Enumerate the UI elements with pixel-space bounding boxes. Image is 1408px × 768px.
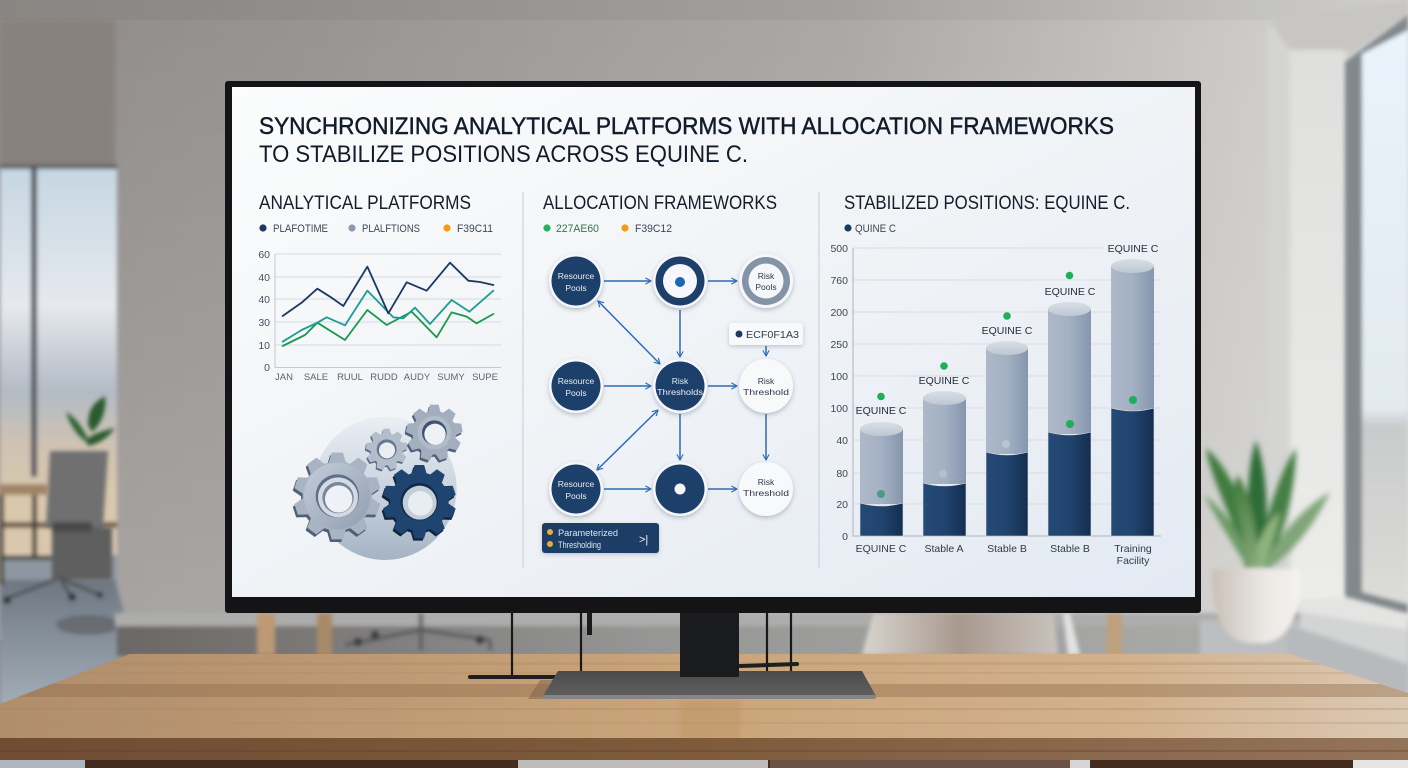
markers above bars [877, 272, 1073, 400]
legend: allocation frameworks: 227AE60 [556, 223, 599, 235]
legend: analytical platforms [259, 223, 493, 235]
node: risk threshold light [739, 359, 793, 413]
legend: analytical platforms: F39C11 [457, 223, 493, 235]
node: risk threshold bottom: Risk [758, 477, 775, 487]
monitor frame [225, 81, 1201, 613]
right window and sill [1285, 15, 1408, 695]
screen [232, 87, 1195, 597]
value labels: EQUINE C [982, 325, 1033, 337]
bar: stable b second [1048, 302, 1091, 536]
node: dark dot [653, 462, 707, 516]
category labels: Stable A [924, 543, 964, 555]
background chair seen under the monitor [257, 613, 1122, 655]
bar chart: 40 [836, 435, 848, 447]
node: resource pools middle: Resource [558, 376, 594, 386]
node: risk pools: Risk [758, 271, 775, 281]
line chart [258, 249, 501, 383]
icon: large gear [292, 453, 381, 542]
arrows [597, 281, 766, 489]
line chart: SUPE [472, 372, 498, 383]
category labels [856, 543, 1152, 567]
line chart: SUMY [437, 372, 465, 383]
value labels: EQUINE C [1108, 243, 1159, 255]
legend: allocation frameworks: F39C12 [635, 223, 672, 235]
callout: parameterized thresholding button: Parameterized [558, 528, 618, 539]
legend: analytical platforms: PLAFOTIME [273, 223, 328, 235]
heading: allocation frameworks: ALLOCATION FRAMEWORKS [543, 193, 777, 214]
node: risk pools: Pools [755, 282, 777, 292]
node: resource pools middle [549, 359, 603, 413]
category labels: EQUINE C [856, 543, 907, 555]
bar: training facility [1111, 259, 1154, 536]
bar chart: 760 [830, 275, 848, 287]
line chart: 30 [258, 317, 270, 329]
icon: small gear [365, 429, 408, 472]
potted plant [1204, 440, 1330, 643]
title: SYNCHRONIZING ANALYTICAL PLATFORMS WITH ALLOCATION FRAMEWORKS [259, 113, 1114, 140]
bar: stable b first [986, 341, 1028, 536]
node: risk thresholds dark [653, 359, 707, 413]
legend: allocation frameworks [543, 223, 672, 235]
line chart: SALE [304, 372, 328, 383]
bar chart: 80 [836, 468, 848, 480]
bar chart: 20 [836, 499, 848, 511]
node: resource pools bottom [549, 462, 603, 516]
wooden table [0, 654, 1408, 768]
bar chart: 100 [830, 371, 848, 383]
bar chart: 0 [842, 531, 848, 543]
panel: allocation frameworks [542, 193, 803, 553]
line chart: RUUL [337, 372, 363, 383]
callout: parameterized thresholding button: Thresholding [558, 540, 601, 551]
value labels: EQUINE C [1045, 286, 1096, 298]
background plant and chair [4, 396, 115, 604]
value labels: EQUINE C [919, 375, 970, 387]
node: risk threshold bottom: Threshold [743, 488, 789, 498]
white chair [862, 613, 1080, 655]
icon: top right gear [404, 405, 463, 463]
node: resource pools top [549, 254, 603, 308]
node: resource pools top: Resource [558, 271, 594, 281]
category labels: Stable B [1050, 543, 1090, 555]
legend: stabilized positions: QUINE C [855, 223, 896, 235]
heading: stabilized positions: STABILIZED POSITIONS: EQUINE C. [844, 193, 1130, 214]
category labels: Training [1114, 543, 1152, 555]
line chart: RUDD [370, 372, 398, 383]
node: risk threshold light: Risk [758, 376, 775, 386]
title [259, 113, 1114, 168]
value labels [856, 243, 1159, 417]
node: resource pools middle: Pools [565, 388, 587, 398]
line chart: JAN [275, 372, 293, 383]
callout: parameterized thresholding button [542, 523, 659, 553]
category labels: Stable B [987, 543, 1027, 555]
line chart: 40 [258, 294, 270, 306]
bar chart [830, 243, 1161, 567]
node: resource pools top: Pools [565, 283, 587, 293]
node: risk threshold light: Threshold [743, 387, 789, 397]
callout: colour chip [729, 323, 803, 345]
value labels: EQUINE C [856, 405, 907, 417]
line chart: AUDY [404, 372, 431, 383]
heading: analytical platforms: ANALYTICAL PLATFORMS [259, 193, 471, 214]
callout: parameterized thresholding button: >| [639, 534, 648, 546]
title: TO STABILIZE POSITIONS ACROSS EQUINE C. [259, 141, 748, 168]
bar: stable a [923, 391, 966, 536]
bar chart: 100 [830, 403, 848, 415]
node: risk pools [739, 254, 793, 308]
icon: navy gear [381, 465, 456, 541]
line chart: 60 [258, 249, 270, 261]
line chart: 10 [258, 340, 270, 352]
node: resource pools bottom: Resource [558, 479, 594, 489]
node: risk thresholds dark: Risk [672, 376, 689, 386]
callout: colour chip: ECF0F1A3 [746, 330, 799, 341]
node: resource pools bottom: Pools [565, 491, 587, 501]
baseboard and floor strip [115, 613, 1408, 695]
panel: stabilized positions [830, 193, 1161, 567]
node: target ring [653, 254, 707, 308]
bar chart: 250 [830, 339, 848, 351]
monitor stand and cables [470, 613, 876, 699]
bar: equine c [860, 422, 903, 536]
line chart: 40 [258, 272, 270, 284]
icon: gears [292, 405, 463, 560]
line chart: 0 [264, 362, 270, 374]
category labels: Facility [1117, 555, 1150, 567]
node: risk threshold bottom [739, 462, 793, 516]
legend: analytical platforms: PLALFTIONS [362, 223, 420, 235]
bar chart: 200 [830, 307, 848, 319]
panel: analytical platforms [258, 193, 501, 560]
left window [0, 165, 135, 706]
bar chart: 500 [830, 243, 848, 255]
node: risk thresholds dark: Thresholds [657, 387, 703, 397]
